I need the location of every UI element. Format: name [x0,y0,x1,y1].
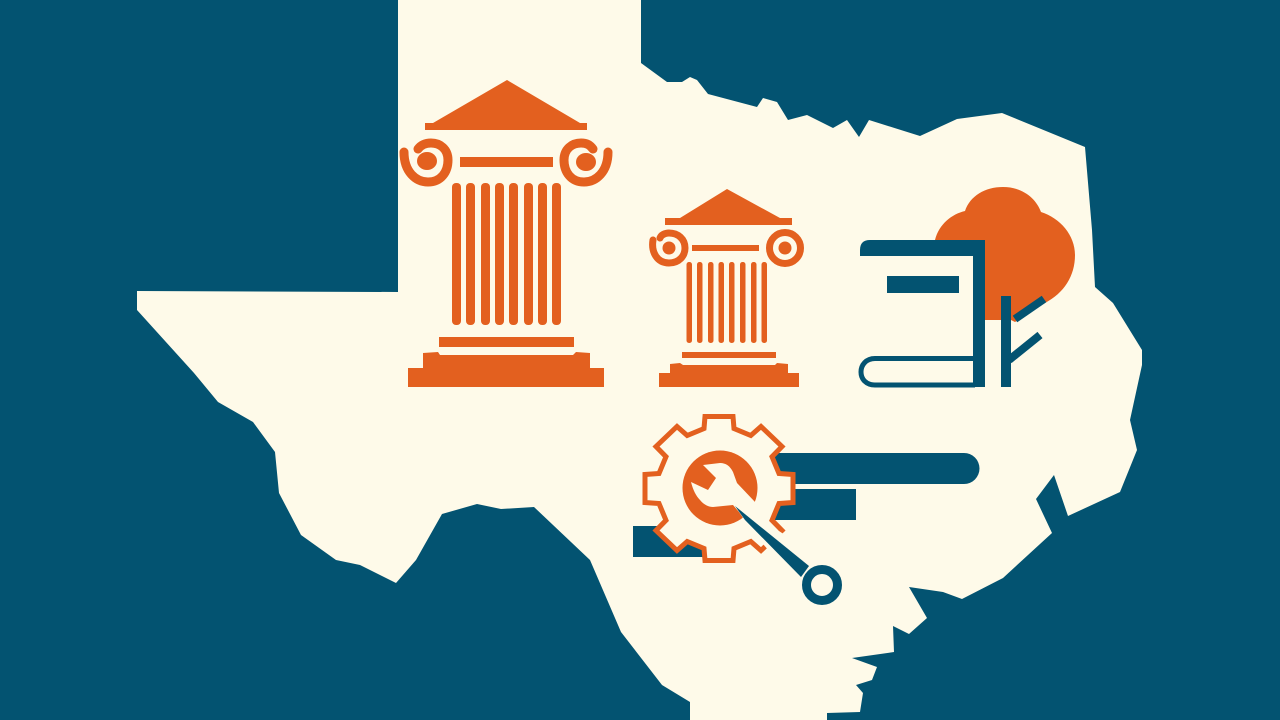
book label [887,276,959,293]
handle ring [806,570,838,600]
book pages [861,358,975,385]
large column right volute [564,143,608,182]
handle shaft [735,506,809,577]
icon: book [860,240,985,387]
large column pediment [425,80,587,130]
book spine [973,240,985,387]
lower branch [1009,335,1040,360]
icon: tree trunk and branches [1001,296,1044,387]
gear outline [645,416,793,560]
icon: navy bars [633,453,979,557]
large column capital bar [460,157,553,167]
icon: small column [653,189,800,387]
middle bar [770,489,856,520]
small column base [659,352,799,387]
small column flutes [686,262,767,343]
icon: wrench handle [735,506,838,600]
short bar [633,526,713,557]
upper branch [1015,299,1044,319]
map: Texas silhouette [137,0,1142,720]
icon: wrench head [691,463,785,552]
large column left volute [404,143,448,182]
large column flutes [452,183,561,325]
icon: gear [645,416,793,560]
long bar [770,453,979,484]
large column base [408,337,604,387]
book top cover [860,240,985,256]
icon: tree crown [935,187,1075,322]
small column pediment [665,189,792,225]
gear hub [682,450,758,526]
small column left volute [653,233,685,263]
icon: large column [404,80,608,387]
small column capital bar [692,245,759,251]
tree trunk [1001,296,1011,387]
small column right volute [770,232,800,264]
